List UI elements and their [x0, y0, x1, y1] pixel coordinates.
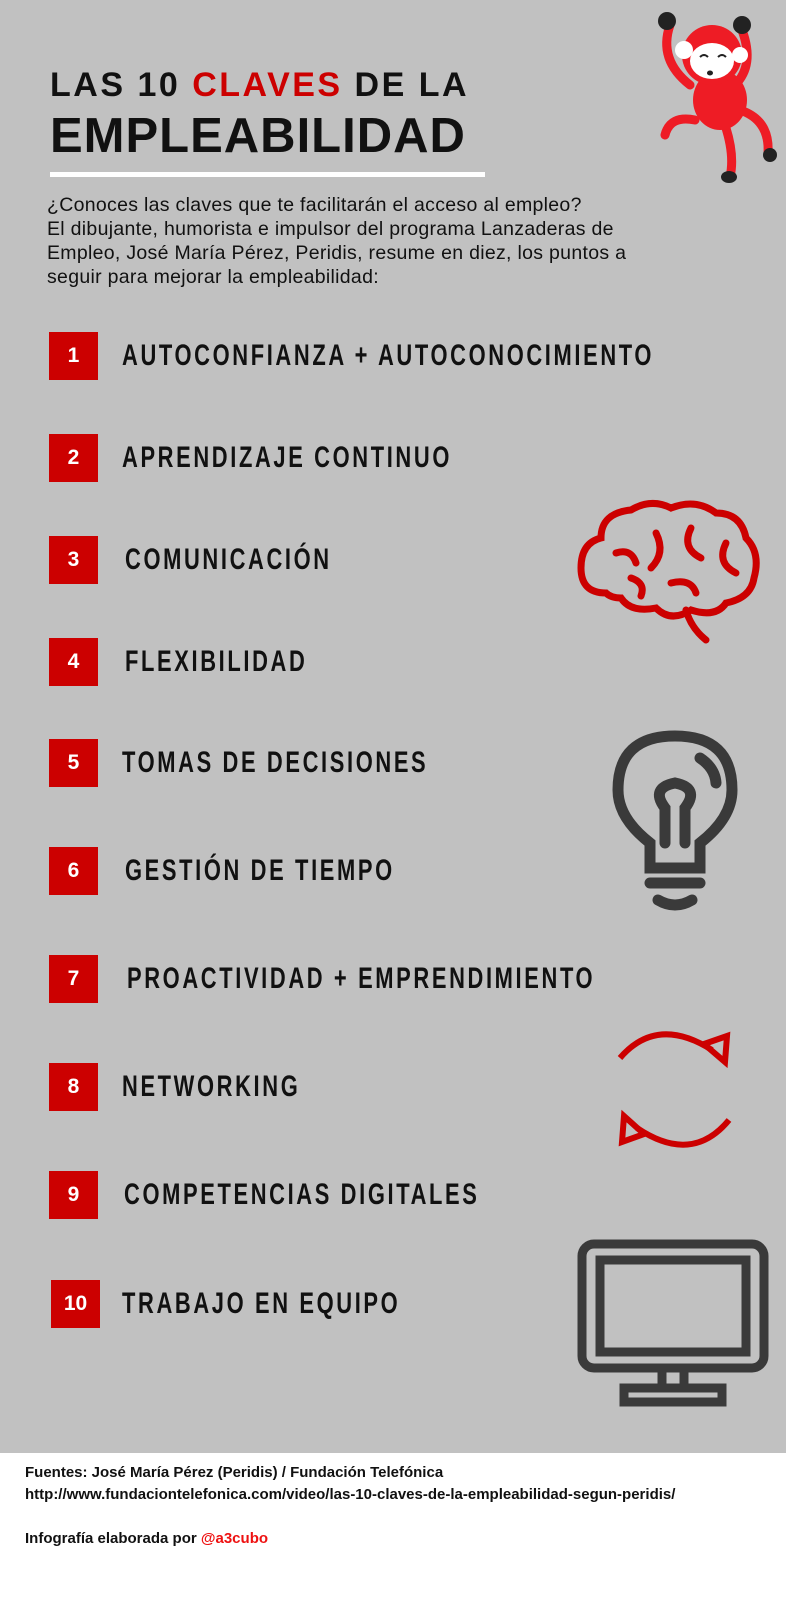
item 8: NETWORKING — [122, 1070, 300, 1103]
icon: monitor — [578, 1240, 768, 1406]
item 4: 4 — [68, 650, 79, 673]
item 6: 6 — [68, 859, 79, 882]
footer: sources — [25, 1464, 676, 1547]
item 5: 5 — [68, 751, 79, 774]
footer: sources: http://www.fundaciontelefonica.com/video/las-10-claves-de-la-empleabilidad-segun-peridis/ — [25, 1486, 675, 1503]
item 3: COMUNICACIÓN — [125, 543, 332, 576]
footer: sources: Fuentes: José María Pérez (Peridis) / Fundación Telefónica — [25, 1464, 443, 1481]
item 9: 9 — [68, 1183, 79, 1206]
icon: monkey — [658, 12, 777, 183]
item 1 — [49, 332, 654, 380]
item 5 — [49, 739, 428, 787]
item 9: COMPETENCIAS DIGITALES — [124, 1178, 480, 1211]
item 9 — [49, 1171, 480, 1219]
title: EMPLEABILIDAD — [50, 109, 466, 163]
title: LAS 10 CLAVES DE LA — [50, 66, 469, 104]
item 8: 8 — [68, 1075, 79, 1098]
item 1: AUTOCONFIANZA + AUTOCONOCIMIENTO — [122, 339, 654, 372]
item 3 — [49, 536, 332, 584]
intro text: El dibujante, humorista e impulsor del programa Lanzaderas de Empleo, José María Pérez, Peridis, resume en diez, los puntos a seguir para mejorar la empleabilidad: — [47, 218, 626, 288]
item 7 — [49, 955, 595, 1003]
title — [50, 66, 485, 177]
icon: cycle arrows — [618, 1031, 732, 1148]
item 4: FLEXIBILIDAD — [125, 645, 307, 678]
icon: light bulb — [612, 730, 738, 910]
item 5: TOMAS DE DECISIONES — [122, 746, 428, 779]
item 2: 2 — [68, 446, 79, 469]
item 8 — [49, 1063, 300, 1111]
item 4 — [49, 638, 307, 686]
item 3: 3 — [68, 548, 79, 571]
item 2: APRENDIZAJE CONTINUO — [122, 441, 452, 474]
item 10: TRABAJO EN EQUIPO — [122, 1287, 400, 1320]
item 7: 7 — [68, 967, 79, 990]
intro text: ¿Conoces las claves que te facilitarán el acceso al empleo? — [47, 194, 582, 216]
item 10 — [51, 1280, 400, 1328]
icon: brain — [578, 500, 760, 644]
footer: sources: Infografía elaborada por @a3cubo — [25, 1530, 268, 1547]
item 6: GESTIÓN DE TIEMPO — [125, 854, 395, 887]
item 2 — [49, 434, 452, 482]
item 10: 10 — [64, 1292, 87, 1315]
item 7: PROACTIVIDAD + EMPRENDIMIENTO — [127, 962, 595, 995]
item 6 — [49, 847, 395, 895]
item 1: 1 — [68, 344, 79, 367]
